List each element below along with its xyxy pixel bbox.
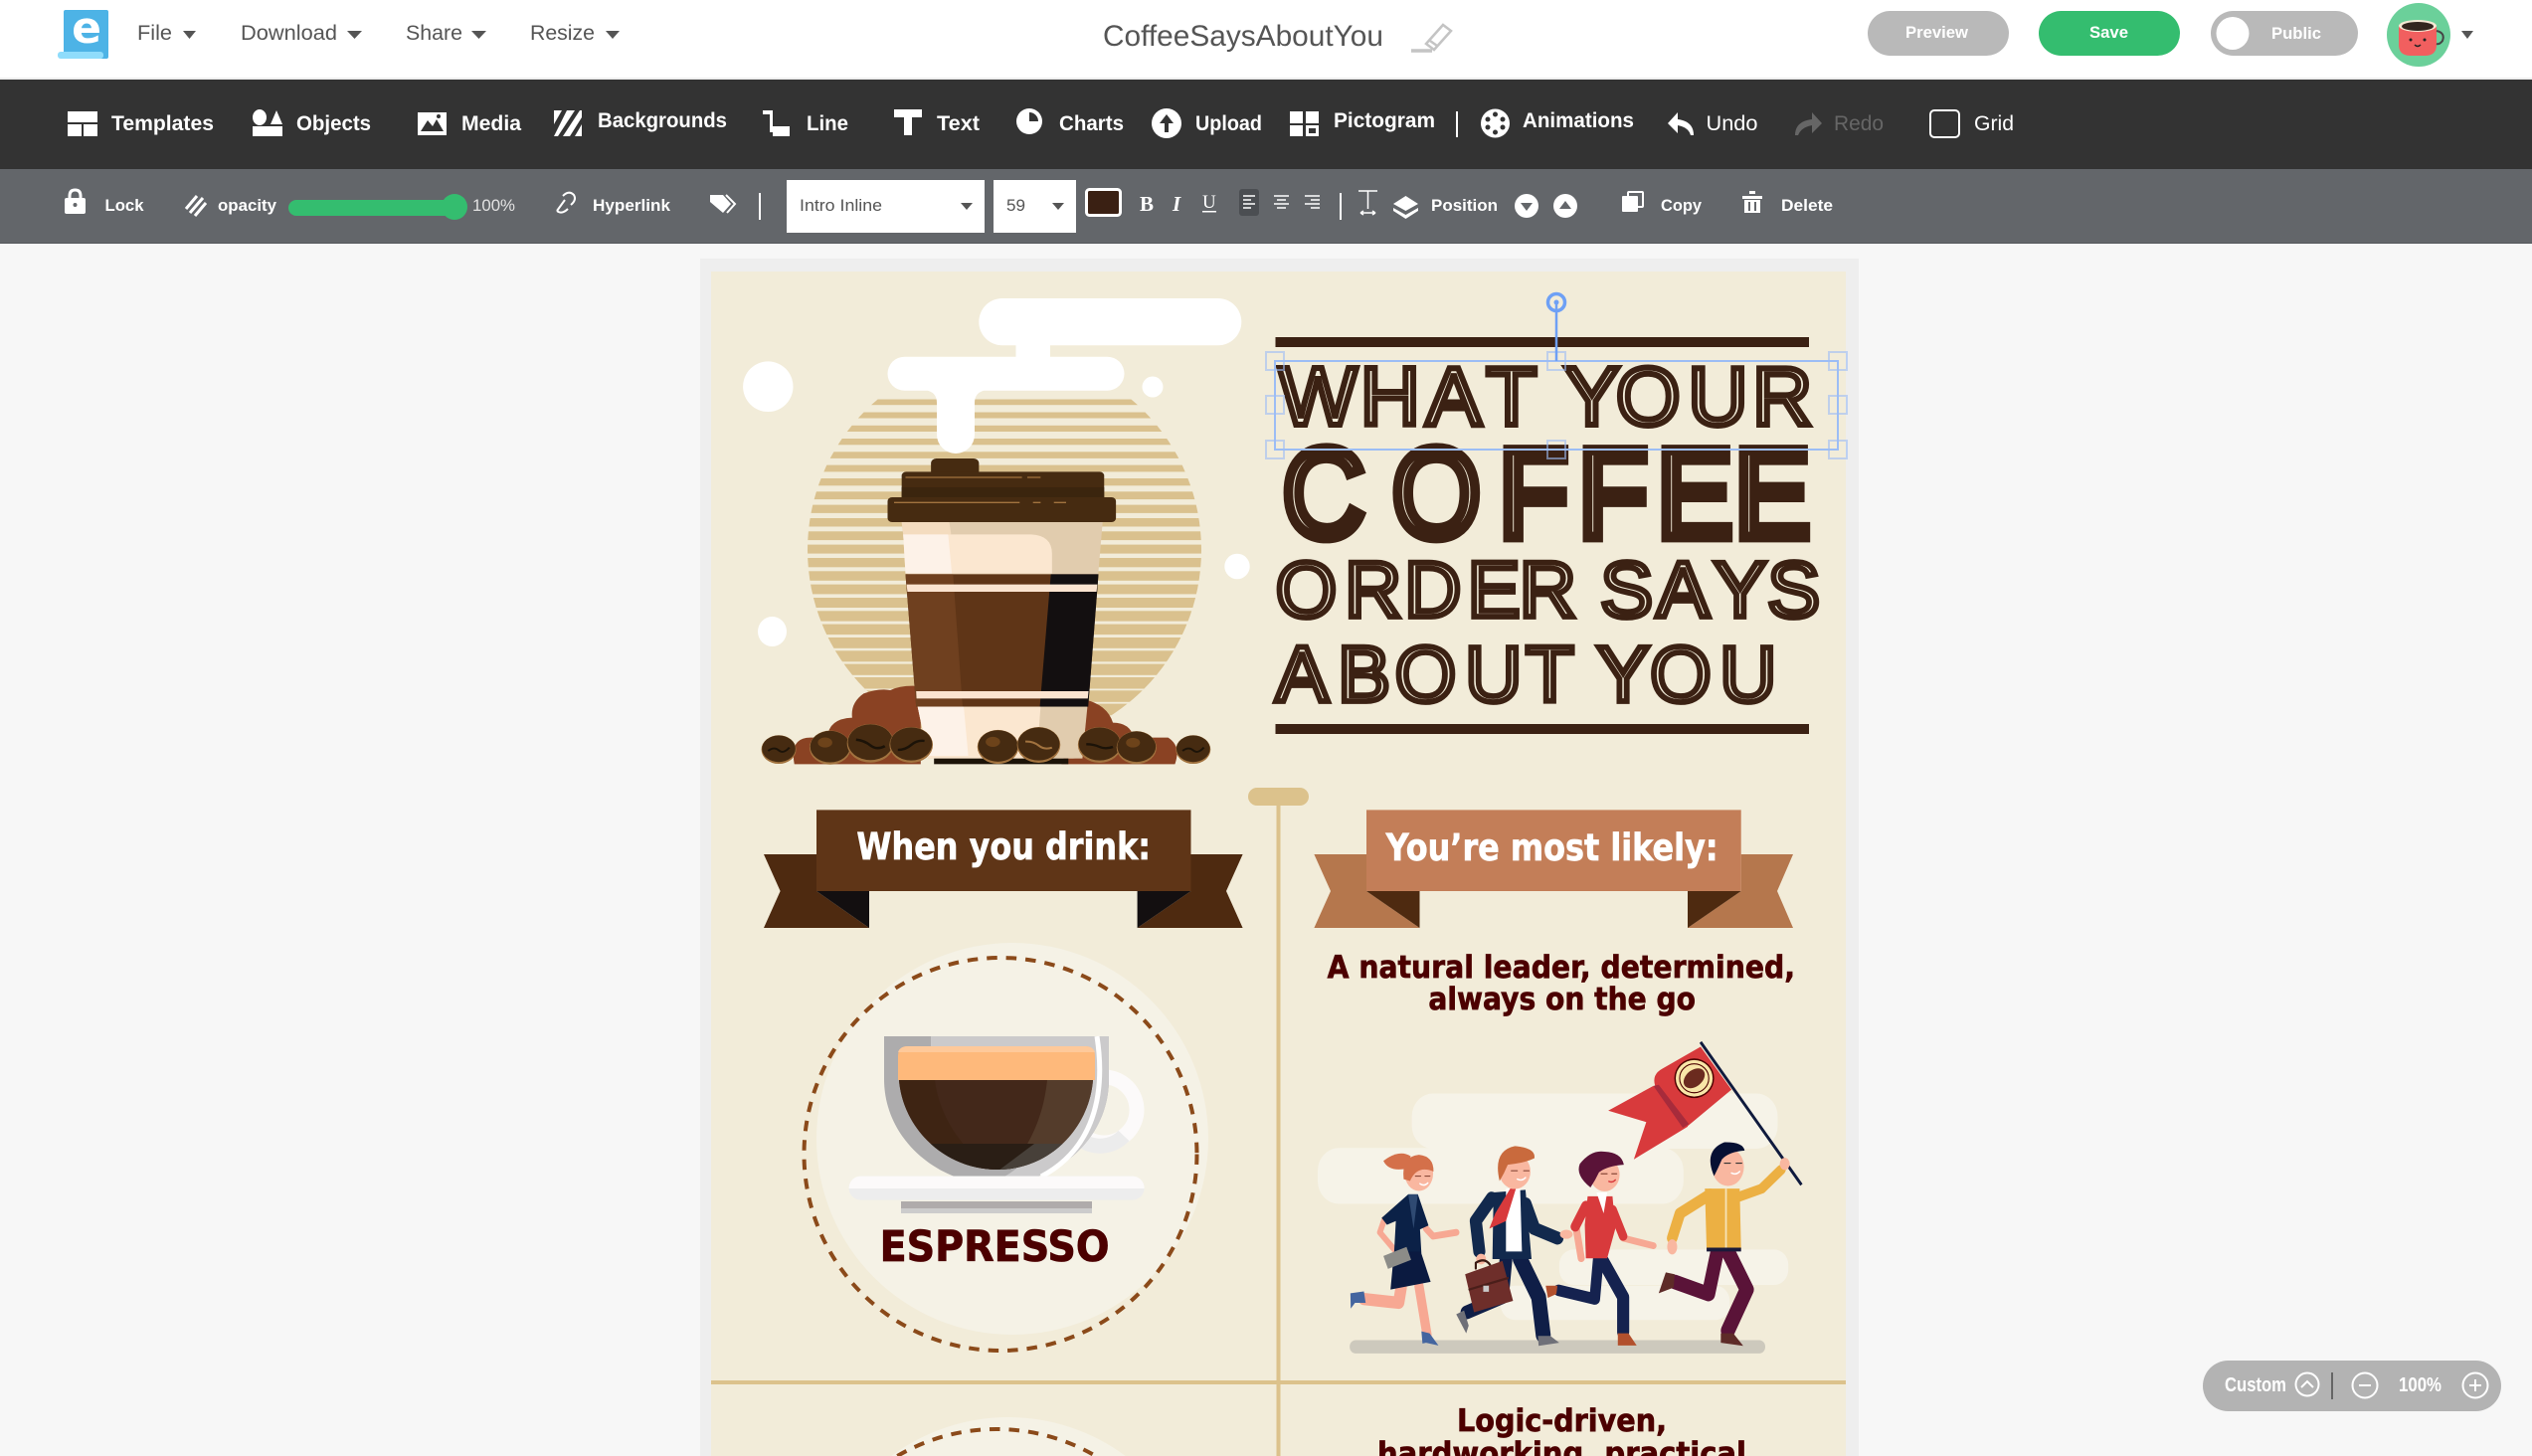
grid toggle: [1930, 110, 2014, 137]
font size select: [994, 180, 1076, 233]
icon: app logo: [58, 3, 108, 59]
animations tool: Animations: [1523, 109, 1634, 132]
preview button: Preview: [1905, 23, 1969, 42]
delete control: Delete: [1781, 196, 1833, 215]
zoom control: 100%: [2399, 1374, 2442, 1396]
font select: Intro Inline: [800, 196, 882, 215]
redo tool: [1795, 112, 1884, 135]
column divider: [1248, 788, 1309, 1456]
coffee beans: [762, 724, 1210, 765]
share menu: Share: [406, 22, 462, 45]
resize menu: Resize: [530, 22, 595, 45]
public toggle: [2211, 11, 2358, 56]
italic button: I: [1172, 192, 1181, 216]
top header bar: [0, 0, 2532, 80]
copy control: Copy: [1661, 196, 1703, 215]
title line: coffee: COFFEE: [1283, 423, 1810, 564]
ribbon: when you drink: When you drink:: [856, 825, 1151, 868]
selection box with handles: [1266, 294, 1847, 458]
ribbon: you're most likely: [1314, 810, 1793, 928]
objects tool: [253, 109, 371, 136]
line tool: [763, 110, 848, 136]
main toolbar: [0, 80, 2532, 169]
align left button: [1239, 189, 1259, 216]
lock control: [65, 190, 144, 215]
steam clouds: [743, 298, 1250, 646]
upload tool: [1152, 108, 1262, 138]
main title: [1275, 337, 1820, 734]
description: logic-driven: Logic-driven,: [1457, 1403, 1667, 1439]
description: natural leader: [1328, 950, 1795, 1017]
espresso badge: [804, 943, 1208, 1351]
file menu: [137, 22, 196, 45]
backgrounds tool: Backgrounds: [598, 109, 727, 132]
cup body: [902, 522, 1103, 759]
colour swatch: [1086, 189, 1120, 215]
charts tool: [1016, 108, 1124, 135]
line tool: Line: [807, 112, 848, 135]
position down button: [1515, 194, 1538, 218]
second row: dashed badge partially visible: [891, 1417, 1126, 1456]
dashed ring: [804, 958, 1197, 1351]
file menu: File: [137, 22, 172, 45]
opacity control: [186, 196, 277, 216]
ribbon: when you drink: [764, 810, 1243, 928]
hero illustration: takeaway cup: [743, 298, 1250, 765]
formatting toolbar: [0, 169, 2532, 244]
zoom control: Custom: [2225, 1374, 2286, 1396]
ground: [1350, 1340, 1765, 1354]
lock control: Lock: [105, 196, 144, 215]
ribbon: you're most likely: You’re most likely:: [1385, 826, 1718, 869]
icon: layers: [1393, 196, 1418, 219]
icon: espresso cup: [849, 1036, 1145, 1213]
undo tool: [1668, 112, 1758, 135]
description: natural leader: always on the go: [1428, 982, 1696, 1017]
hyperlink control: Hyperlink: [593, 196, 671, 215]
espresso label: ESPRESSO: [880, 1222, 1110, 1272]
text tool: [894, 109, 980, 135]
description: logic-driven: [1377, 1403, 1746, 1456]
download menu: Download: [241, 22, 337, 45]
charts tool: Charts: [1059, 112, 1124, 135]
media tool: Media: [461, 112, 521, 135]
redo tool: Redo: [1834, 112, 1884, 135]
align center button: [1274, 196, 1289, 208]
upload tool: Upload: [1195, 112, 1262, 135]
align right button: [1305, 196, 1320, 208]
objects tool: Objects: [296, 112, 371, 135]
save button: [2039, 11, 2180, 56]
position up button: [1553, 194, 1577, 218]
animations tool: [1481, 109, 1634, 137]
undo tool: Undo: [1707, 112, 1758, 135]
title line: order says: ORDER SAYS: [1276, 545, 1820, 634]
copy control: [1622, 192, 1703, 215]
badge background: [816, 943, 1208, 1335]
cup base: [934, 759, 1068, 764]
font size select: 59: [1006, 196, 1025, 215]
person: man with briefcase: [1456, 1146, 1572, 1346]
person: woman in red: [1545, 1152, 1653, 1346]
hyperlink control: [557, 193, 671, 215]
person: woman with tablet: [1351, 1154, 1456, 1346]
save button: Save: [2089, 23, 2128, 42]
cup drawing: [762, 458, 1210, 765]
public toggle: Public: [2271, 24, 2321, 43]
text tool: Text: [937, 112, 980, 135]
icon: account caret: [2461, 31, 2473, 39]
opacity control: opacity: [218, 196, 277, 215]
icon: app logo: e: [72, 3, 101, 54]
icon: line height: [1358, 191, 1377, 215]
position label: Position: [1431, 196, 1498, 215]
description: natural leader: A natural leader, determined,: [1328, 950, 1795, 986]
title line: about you: ABOUT YOU: [1276, 630, 1776, 718]
preview button: [1868, 11, 2009, 56]
cup lid: [887, 458, 1116, 522]
infographic canvas: [700, 259, 1859, 1456]
delete control: [1742, 191, 1833, 215]
backgrounds tool: [554, 109, 727, 136]
person: leader in yellow: [1659, 1142, 1790, 1346]
font select: [787, 180, 985, 233]
illustration: business team with flag: [1318, 1042, 1801, 1354]
icon: tag: [710, 195, 735, 213]
pictogram tool: Pictogram: [1334, 109, 1435, 132]
media tool: [418, 112, 521, 135]
document title: CoffeeSaysAboutYou: [1103, 20, 1383, 53]
striped sun: [796, 400, 1213, 742]
underline button: U: [1202, 192, 1216, 213]
row divider: [711, 1380, 1846, 1384]
icon: pencil: [1411, 25, 1451, 51]
grid toggle: Grid: [1974, 112, 2014, 135]
share menu: [406, 22, 486, 45]
templates tool: Templates: [111, 112, 214, 135]
flag: [1608, 1042, 1801, 1184]
opacity value: 100%: [472, 196, 515, 215]
background clouds: [1318, 1094, 1788, 1320]
icon: avatar cup: [2387, 3, 2450, 67]
pictogram tool: [1290, 109, 1435, 136]
opacity slider: [288, 194, 467, 220]
bean pile: [794, 686, 1177, 764]
title line: what your: WHAT YOUR: [1279, 350, 1812, 443]
zoom control: [2203, 1361, 2501, 1411]
bold button: B: [1140, 192, 1154, 216]
templates tool: [68, 111, 214, 136]
